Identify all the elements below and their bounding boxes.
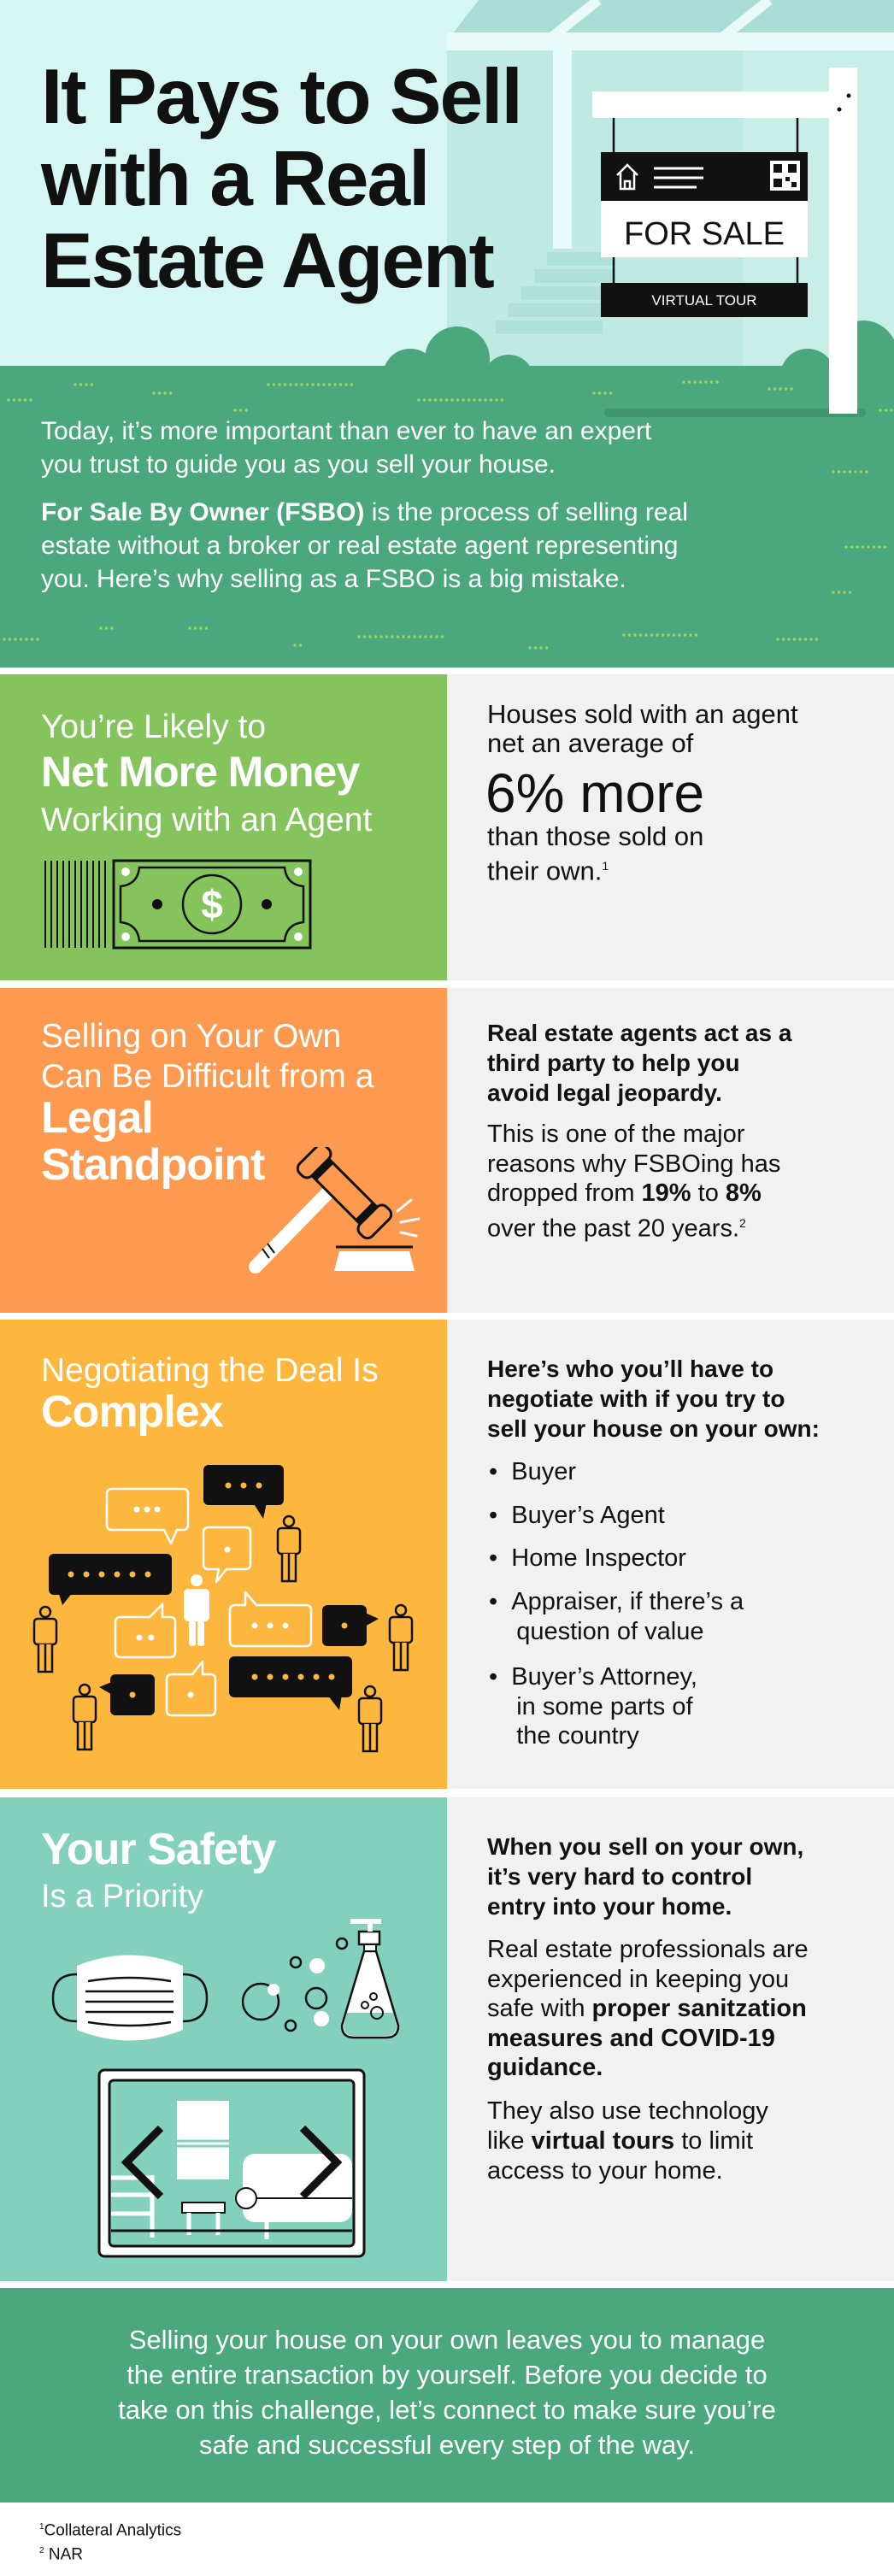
for sale sign bbox=[592, 68, 857, 414]
text: control entry: it’s very hard to control bbox=[487, 1863, 752, 1890]
panel: safety: safe with proper sanitzation bbox=[487, 1995, 807, 2022]
panel: safety: They also use technology bbox=[487, 2097, 768, 2125]
intro FSBO definition: estate without a broker or real estate agent representing bbox=[41, 532, 678, 560]
for sale sign: FOR SALE bbox=[624, 216, 785, 252]
intro FSBO definition: For Sale By Owner (FSBO) is the process of selling real bbox=[41, 498, 688, 526]
for sale sign: VIRTUAL TOUR bbox=[651, 292, 757, 309]
text: who you negotiate with: sell your house on your own: bbox=[487, 1415, 820, 1442]
intro FSBO definition bbox=[41, 498, 688, 593]
title: It Pays to Sell bbox=[41, 54, 521, 140]
closing callout: take on this challenge, let’s connect to make sure you’re bbox=[118, 2395, 776, 2425]
heading: Can Be Difficult from a bbox=[41, 1058, 373, 1095]
list of parties bbox=[489, 1458, 744, 1750]
heading: Net More Money bbox=[41, 748, 359, 796]
closing callout bbox=[0, 2288, 894, 2502]
title: with a Real bbox=[41, 136, 428, 222]
closing callout: Selling your house on your own leaves you to manage bbox=[129, 2325, 765, 2355]
text: control entry: When you sell on your own, bbox=[487, 1833, 803, 1860]
text: 6% more: net an average of bbox=[487, 728, 693, 758]
green lawn bbox=[0, 366, 894, 668]
intro text: you trust to guide you as you sell your house. bbox=[41, 450, 556, 479]
panel: net more money: than those sold on bbox=[487, 821, 703, 851]
heading: Selling on Your Own bbox=[41, 1018, 341, 1055]
text: 6% more bbox=[487, 699, 798, 758]
illustration: speech bubbles and people bbox=[32, 1465, 414, 1752]
intro text bbox=[41, 417, 651, 479]
text: third party bbox=[487, 1020, 792, 1106]
panel: safety: measures and COVID-19 bbox=[487, 2024, 775, 2051]
panel: legal standpoint: This is one of the major bbox=[487, 1120, 744, 1148]
text: who you negotiate with bbox=[487, 1356, 820, 1442]
heading bbox=[41, 709, 373, 838]
icon: money: $ bbox=[201, 882, 223, 926]
panel: legal standpoint: reasons why FSBOing has bbox=[487, 1150, 780, 1178]
icon: money bbox=[44, 860, 311, 949]
panel: negotiating: • Appraiser, if there’s a bbox=[489, 1588, 744, 1615]
panel: safety: access to your home. bbox=[487, 2157, 723, 2185]
panel: negotiating: Complex bbox=[41, 1387, 223, 1437]
text: control entry bbox=[487, 1833, 803, 1920]
heading bbox=[41, 1018, 374, 1095]
footnotes: 1Collateral Analytics bbox=[39, 2521, 181, 2539]
heading: Your Safety bbox=[41, 1825, 275, 1874]
icon: gavel bbox=[249, 1147, 421, 1273]
footnotes bbox=[39, 2521, 181, 2564]
panel: safety: experienced in keeping you bbox=[487, 1966, 789, 1993]
house bbox=[447, 0, 894, 376]
panel: negotiating: • Buyer’s Attorney, bbox=[489, 1663, 697, 1691]
text: who you negotiate with: negotiate with if you try to bbox=[487, 1385, 785, 1412]
panel: negotiating: • Buyer bbox=[489, 1458, 576, 1485]
panel: negotiating bbox=[0, 1320, 894, 1789]
heading: Negotiating the Deal Is bbox=[41, 1352, 379, 1389]
icons: mask, bubbles, sanitizer, virtual tour monitor bbox=[51, 1919, 400, 2258]
panel: safety bbox=[0, 1797, 894, 2281]
panel: negotiating: the country bbox=[516, 1722, 639, 1750]
panel: legal standpoint: over the past 20 years.2 bbox=[487, 1215, 746, 1243]
text: who you negotiate with: Here’s who you’ll have to bbox=[487, 1356, 773, 1382]
panel: negotiating: • Buyer’s Agent bbox=[489, 1502, 665, 1529]
closing callout: the entire transaction by yourself. Before you decide to bbox=[126, 2360, 768, 2390]
text: third party: Real estate agents act as a bbox=[487, 1020, 791, 1046]
panel: net more money: their own.1 bbox=[487, 856, 609, 885]
panel: safety: Real estate professionals are bbox=[487, 1936, 809, 1963]
title bbox=[41, 54, 521, 304]
panel: negotiating: question of value bbox=[516, 1617, 704, 1644]
panel: negotiating: • Home Inspector bbox=[489, 1544, 686, 1572]
panel: safety: like virtual tours to limit bbox=[487, 2127, 753, 2155]
panel: legal standpoint bbox=[0, 988, 894, 1313]
heading: You’re Likely to bbox=[41, 709, 266, 745]
header illustration bbox=[0, 0, 894, 668]
panel: safety: guidance. bbox=[487, 2054, 603, 2081]
panel: legal standpoint: dropped from 19% to 8% bbox=[487, 1179, 762, 1207]
panel: net more money bbox=[0, 674, 894, 980]
title: Estate Agent bbox=[41, 218, 493, 304]
heading: Working with an Agent bbox=[41, 802, 372, 838]
panel: net more money: 6% more bbox=[485, 762, 704, 824]
text: third party: avoid legal jeopardy. bbox=[487, 1079, 722, 1106]
panel: legal standpoint: Standpoint bbox=[41, 1140, 265, 1190]
text: 6% more: Houses sold with an agent bbox=[487, 699, 798, 729]
intro text: Today, it’s more important than ever to have an expert bbox=[41, 417, 651, 445]
text: control entry: entry into your home. bbox=[487, 1893, 732, 1920]
panel: negotiating: in some parts of bbox=[516, 1692, 693, 1720]
text: third party: third party to help you bbox=[487, 1050, 740, 1076]
panel: safety: Is a Priority bbox=[41, 1879, 203, 1914]
closing callout: safe and successful every step of the way. bbox=[199, 2430, 695, 2460]
panel: legal standpoint: Legal bbox=[41, 1093, 153, 1143]
footnotes: 2 NAR bbox=[39, 2546, 83, 2564]
intro FSBO definition: you. Here’s why selling as a FSBO is a big mistake. bbox=[41, 565, 626, 593]
